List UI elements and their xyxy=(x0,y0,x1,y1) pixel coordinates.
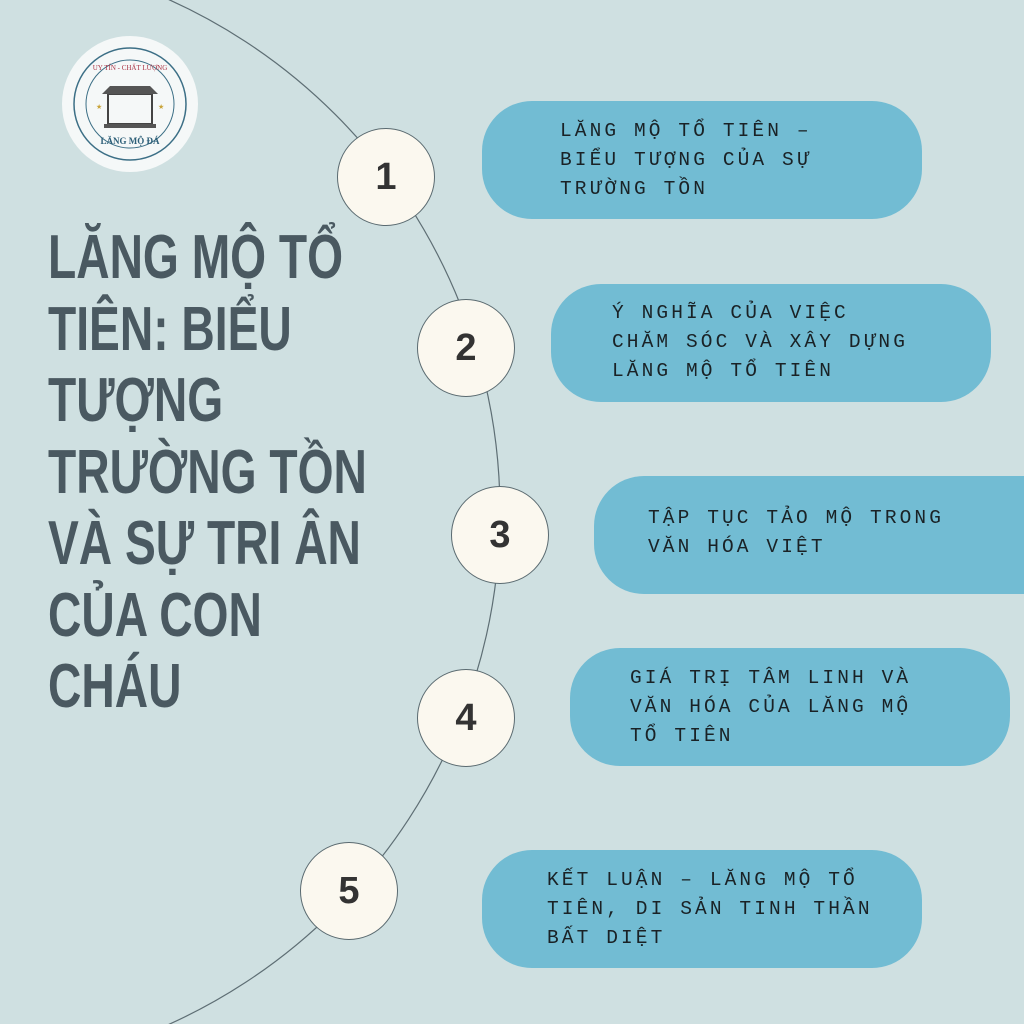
title xyxy=(48,222,367,721)
text 2: CHĂM SÓC VÀ XÂY DỰNG xyxy=(612,331,908,353)
logo: ★ xyxy=(158,103,164,111)
number 2 xyxy=(417,299,515,397)
number 5 xyxy=(300,842,398,940)
text 4 xyxy=(630,666,911,747)
title: TIÊN: BIỂU xyxy=(48,294,292,364)
number 5: 5 xyxy=(338,870,360,912)
number 3 xyxy=(451,486,549,584)
title: CỦA CON xyxy=(48,580,262,650)
number 4 xyxy=(417,669,515,767)
text 4: VĂN HÓA CỦA LĂNG MỘ xyxy=(630,696,911,718)
title: VÀ SỰ TRI ÂN xyxy=(48,509,361,578)
logo: UY TÍN - CHẤT LƯỢNG xyxy=(93,64,167,72)
box 5 xyxy=(482,850,922,968)
title: TRƯỜNG TỒN xyxy=(48,438,367,506)
box 4 xyxy=(570,648,1010,766)
title: CHÁU xyxy=(48,652,181,721)
text 1: LĂNG MỘ TỔ TIÊN – xyxy=(560,120,812,142)
text 1 xyxy=(560,118,812,200)
title: TƯỢNG xyxy=(48,366,223,435)
text 5: KẾT LUẬN – LĂNG MỘ TỔ xyxy=(547,869,858,891)
text 1: BIỂU TƯỢNG CỦA SỰ xyxy=(560,149,812,171)
title: LĂNG MỘ TỔ xyxy=(48,223,343,292)
text 2: LĂNG MỘ TỔ TIÊN xyxy=(612,360,834,382)
number 3: 3 xyxy=(489,514,511,556)
number 1: 1 xyxy=(375,156,397,198)
text 2 xyxy=(612,300,908,382)
text 1: TRƯỜNG TỒN xyxy=(560,178,708,200)
text 5: TIÊN, DI SẢN TINH THẦN xyxy=(547,898,873,920)
logo: ★ xyxy=(96,103,102,111)
logo xyxy=(62,36,198,172)
text 3: VĂN HÓA VIỆT xyxy=(648,536,826,558)
text 3: TẬP TỤC TẢO MỘ TRONG xyxy=(648,507,944,529)
text 4: TỔ TIÊN xyxy=(630,725,734,747)
text 5: BẤT DIỆT xyxy=(547,927,665,949)
box 2 xyxy=(551,284,991,402)
number 2: 2 xyxy=(455,326,477,368)
number 4: 4 xyxy=(455,696,477,738)
box 1 xyxy=(482,101,922,219)
text 4: GIÁ TRỊ TÂM LINH VÀ xyxy=(630,667,911,689)
text 2: Ý NGHĨA CỦA VIỆC xyxy=(612,302,849,324)
logo: LĂNG MỘ ĐÁ xyxy=(100,136,160,146)
number 1 xyxy=(337,128,435,226)
text 5 xyxy=(547,868,873,949)
text 3 xyxy=(648,506,944,558)
box 3 xyxy=(594,476,1024,594)
